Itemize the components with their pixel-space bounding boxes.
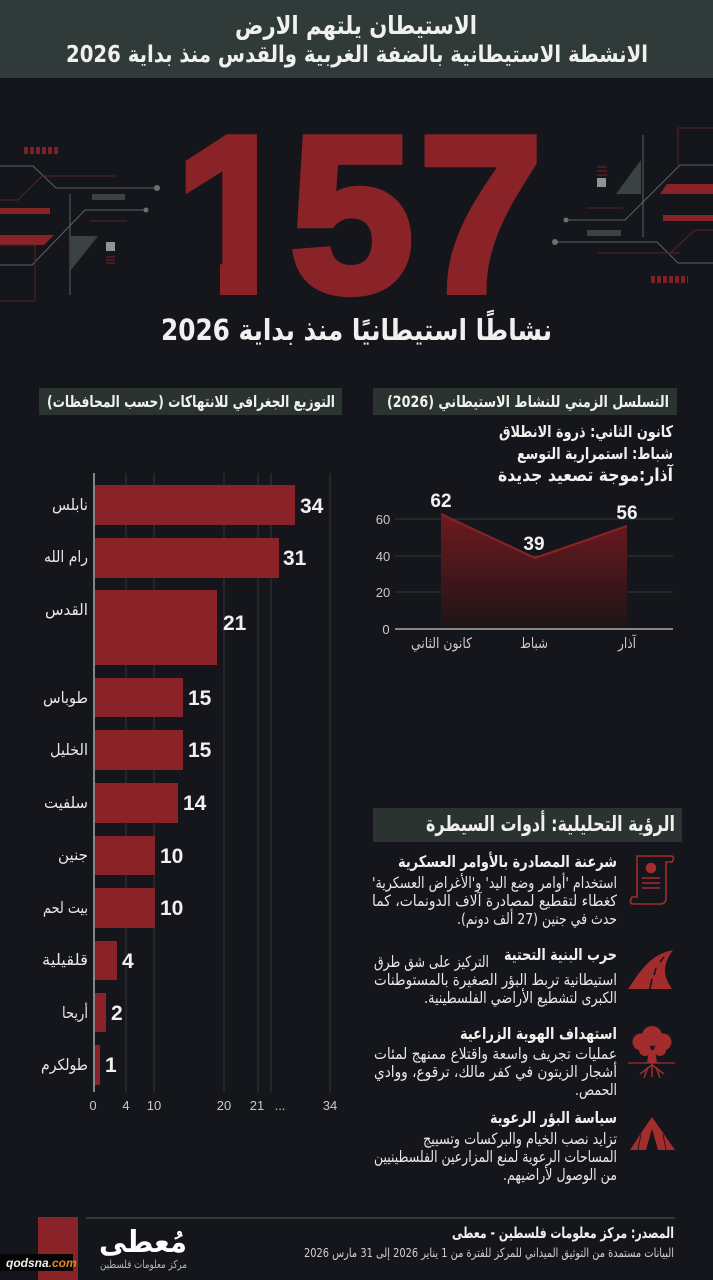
icon: road xyxy=(628,950,673,989)
bar chart: 21 xyxy=(250,1098,264,1113)
footer xyxy=(38,1217,675,1280)
timeline notes xyxy=(498,422,674,486)
area chart: 40 xyxy=(376,549,390,564)
big number xyxy=(186,134,537,298)
item: pastoral outposts xyxy=(374,1108,617,1185)
bar chart: 4 xyxy=(122,950,134,973)
bar chart: 4 xyxy=(122,1098,130,1113)
bar chart: 15 xyxy=(188,687,212,710)
panel: geographic distribution xyxy=(39,388,342,1113)
big number caption: نشاطًا استيطانيًا منذ بداية 2026 xyxy=(161,310,552,347)
area chart: شباط xyxy=(520,636,548,652)
watermark: qodsna.com xyxy=(6,1256,77,1270)
icon: tree xyxy=(628,1026,675,1078)
bar chart: سلفيت xyxy=(44,794,88,812)
bar chart: 15 xyxy=(188,739,212,762)
panel: analysis xyxy=(372,808,682,1185)
item: military orders: استخدام 'أوامر وضع اليد' و'الأغراض العسكرية' xyxy=(372,872,617,893)
big number: 7 xyxy=(419,91,542,339)
item: agricultural identity: أشجار الزيتون في كفر مالك، ترقوع، ووادي xyxy=(374,1061,617,1082)
big number: 1 xyxy=(174,91,298,339)
title: الاستيطان يلتهم الارض xyxy=(235,11,477,41)
bar chart: قلقيلية xyxy=(42,951,88,969)
area chart: 60 xyxy=(376,512,390,527)
bar chart: نابلس xyxy=(52,496,88,514)
bar chart: ... xyxy=(275,1098,285,1113)
item: pastoral outposts: سياسة البؤر الرعوية xyxy=(490,1108,617,1127)
bar chart: بيت لحم xyxy=(43,899,88,917)
timeline notes: آذار:موجة تصعيد جديدة xyxy=(498,463,674,486)
decorative circuit left xyxy=(0,150,160,301)
bar chart: طولكرم xyxy=(41,1056,88,1074)
bar chart: الخليل xyxy=(50,741,88,759)
bar chart: 10 xyxy=(160,845,183,868)
heading: analysis xyxy=(373,808,682,842)
item: agricultural identity: استهداف الهوية الزراعية xyxy=(460,1024,617,1043)
bar chart xyxy=(41,473,337,1113)
item: military orders: كغطاء لتقطيع لمصادرة آلاف الدونمات، كما xyxy=(372,891,618,911)
item: pastoral outposts: تزايد نصب الخيام والبركسات وتسييج xyxy=(423,1130,617,1149)
area chart: 62 xyxy=(430,491,452,512)
icon: tent xyxy=(630,1117,675,1150)
bar chart: 10 xyxy=(160,897,183,920)
decorative circuit right xyxy=(552,128,713,280)
item: infrastructure war: حرب البنية التحتية xyxy=(504,945,617,964)
area chart: 0 xyxy=(382,622,390,637)
bar chart: 31 xyxy=(283,547,307,570)
item: military orders xyxy=(372,852,618,929)
item: agricultural identity: عمليات تجريف واسعة واقتلاع ممنهج لمئات xyxy=(374,1045,617,1064)
logo: مركز معلومات فلسطين xyxy=(100,1258,187,1271)
area chart: 39 xyxy=(523,534,545,555)
bar chart: 21 xyxy=(223,612,247,635)
item: infrastructure war: الكبرى لتشطيع الأراضي الفلسطينية. xyxy=(424,988,617,1008)
big number: 5 xyxy=(290,91,413,339)
logo: مُعطى xyxy=(99,1225,187,1260)
bar chart: طوباس xyxy=(43,689,88,707)
bar chart: 20 xyxy=(217,1098,231,1113)
item: infrastructure war: التركيز على شق طرق xyxy=(374,953,489,971)
item: military orders: شرعنة المصادرة بالأوامر العسكرية xyxy=(398,852,617,871)
heading: geographic: التوزيع الجغرافي للانتهاكات (حسب المحافظات) xyxy=(47,392,335,412)
icon: scroll document xyxy=(630,856,674,904)
bar chart: 10 xyxy=(147,1098,161,1113)
bar chart: أريحا xyxy=(62,1002,88,1022)
bar chart: 0 xyxy=(89,1098,97,1113)
bar chart: 2 xyxy=(111,1002,123,1025)
bar chart: 1 xyxy=(105,1054,117,1077)
item: infrastructure war: استيطانية تربط البؤر الصغيرة بالمستوطنات xyxy=(374,971,617,989)
area chart: 56 xyxy=(616,503,638,524)
heading: timeline xyxy=(373,388,677,415)
bar chart: جنين xyxy=(58,846,88,864)
item: infrastructure war xyxy=(374,945,617,1008)
item: pastoral outposts: من الوصول لأراضيهم. xyxy=(503,1165,617,1185)
timeline notes: شباط: استمرارية التوسع xyxy=(517,444,673,463)
bar chart: رام الله xyxy=(44,548,88,566)
item: agricultural identity: الحمص. xyxy=(575,1081,617,1099)
bar chart: 14 xyxy=(183,792,207,815)
bar chart: 34 xyxy=(323,1098,337,1113)
area chart xyxy=(376,491,673,652)
panel: timeline xyxy=(373,388,677,652)
item: pastoral outposts: المساحات الرعوية لمنع المزارعين الفلسطينيين xyxy=(374,1148,617,1167)
bar chart: القدس xyxy=(45,601,88,619)
timeline notes: كانون الثاني: ذروة الانطلاق xyxy=(499,422,674,442)
item: agricultural identity xyxy=(374,1024,617,1099)
item: military orders: حدث في جنين (27 ألف دونم). xyxy=(457,908,617,929)
area chart: كانون الثاني xyxy=(411,636,472,652)
area chart: 20 xyxy=(376,585,390,600)
bar chart: 34 xyxy=(300,495,324,518)
heading: geographic xyxy=(39,388,342,415)
header band xyxy=(0,0,713,78)
area chart: آذار xyxy=(617,634,637,652)
